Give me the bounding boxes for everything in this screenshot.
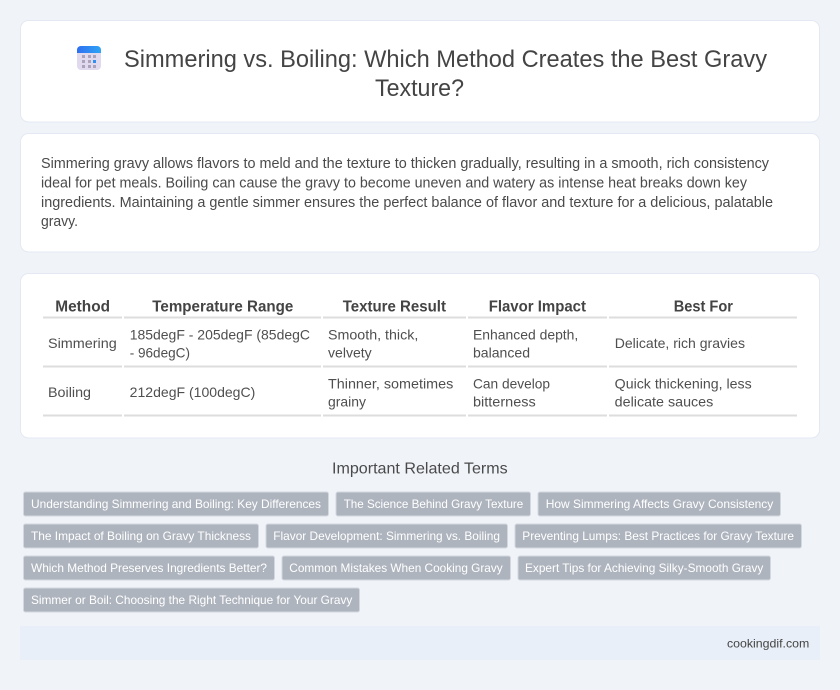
tag: How Simmering Affects Gravy Consistency [546,497,773,511]
tag [515,524,802,548]
tag: The Science Behind Gravy Texture [344,497,524,511]
tag [24,524,258,548]
table row: boiling: Boiling [48,384,91,400]
table row: boiling: grainy [328,393,366,409]
panel: introduction [20,134,820,252]
title: Simmering vs. Boiling: Which Method Creates the Best Gravy [124,46,767,73]
tag: Simmer or Boil: Choosing the Right Technique for Your Gravy [31,593,352,607]
table header row: Flavor Impact [489,299,587,316]
table row: simmering: velvety [328,344,372,360]
tag: Preventing Lumps: Best Practices for Gravy Texture [522,529,794,543]
table header row: Temperature Range [152,299,293,316]
table header row: Best For [674,299,733,316]
tag [24,492,328,516]
tag: The Impact of Boiling on Gravy Thickness [31,529,251,543]
text block: introduction [41,156,773,230]
tag: Understanding Simmering and Boiling: Key Differences [31,497,321,511]
tag [266,524,508,548]
text block: introduction: Simmering gravy allows flavors to meld and the texture to thicken gradually, resulting in a smooth, rich consistency [41,156,770,172]
text block: introduction: ingredients. Maintaining a gentle simmer ensures the perfect balance of flavor and texture for a delicious, palatable [41,195,773,211]
tag [518,556,770,580]
panel: related term tags [24,492,802,612]
panel: header [20,20,820,122]
table row: boiling: Can develop [473,375,550,391]
tag [282,556,510,580]
table header row: Texture Result [343,299,447,316]
tag [24,556,274,580]
tag: Common Mistakes When Cooking Gravy [289,561,503,575]
table row: simmering: Enhanced depth, [473,326,578,342]
heading: important related terms: Important Related Terms [332,460,508,477]
table row: simmering: Smooth, thick, [328,326,418,342]
tag: Which Method Preserves Ingredients Better? [31,561,267,575]
table row: boiling: 212degF (100degC) [130,384,255,400]
table row: boiling: bitterness [473,393,536,409]
footer [20,626,820,660]
icon: calendar [77,46,101,70]
table row: simmering: Simmering [48,335,117,351]
table row: boiling: Quick thickening, less [615,375,752,391]
table row: boiling [48,375,752,409]
tag [24,588,360,612]
text block: introduction: gravy. [41,214,78,230]
tag [538,492,780,516]
panel: comparison table [20,274,820,438]
tag: Flavor Development: Simmering vs. Boiling [273,529,500,543]
table header row: Method [55,299,110,316]
title: Texture? [375,75,464,102]
table header row [55,299,733,316]
table row: simmering: 185degF - 205degF (85degC [130,326,310,342]
table row: boiling: Thinner, sometimes [328,375,453,391]
table row: boiling: delicate sauces [615,393,713,409]
table row: simmering: Delicate, rich gravies [615,335,745,351]
tag: Expert Tips for Achieving Silky-Smooth Gravy [525,561,763,575]
footer source text: cookingdif.com [727,636,809,650]
tag [336,492,530,516]
table row: simmering [48,326,745,360]
title [124,46,767,102]
text block: introduction: ideal for pet meals. Boiling can cause the gravy to become uneven and watery as intense heat breaks down key [41,175,748,191]
table row: simmering: balanced [473,344,530,360]
table row: simmering: - 96degC) [130,344,190,360]
